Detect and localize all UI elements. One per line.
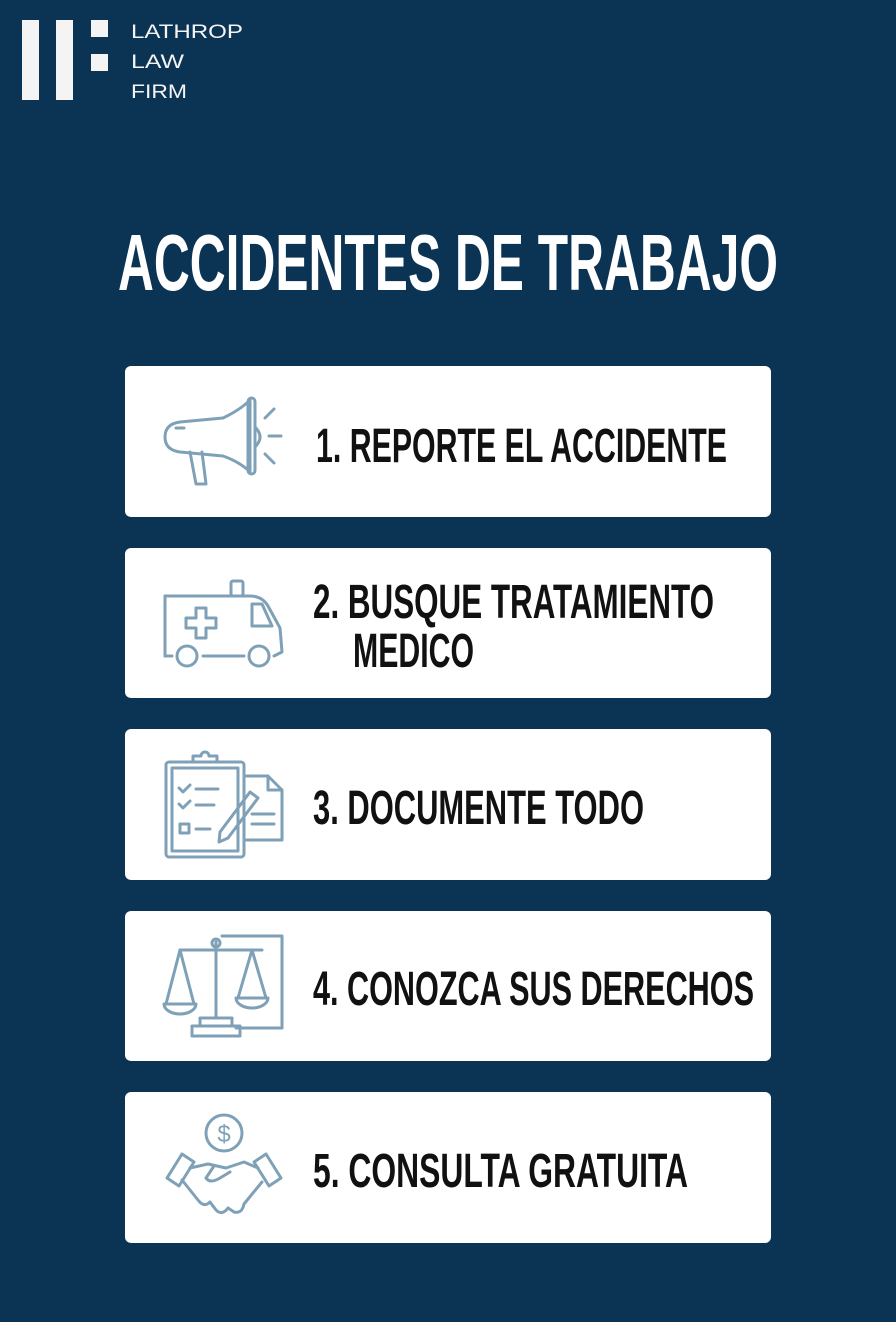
card 5: 5. CONSULTA GRATUITA [313,1145,688,1198]
icon: ambulance [165,581,282,666]
icon: handshake with coin: $ [217,1121,231,1148]
card 2: MEDICO [353,625,474,678]
logo: FIRM [131,82,187,103]
logo: LATHROP [131,22,243,43]
card 2 [125,548,771,698]
card 1 [125,366,771,517]
icon: clipboard [166,752,282,857]
card 5 [125,1092,771,1243]
card 3: 3. DOCUMENTE TODO [313,782,644,835]
icon: megaphone [165,398,281,484]
logo: LAW [131,52,184,73]
card 4 [125,911,771,1061]
card 3 [125,729,771,880]
icon: handshake with coin [167,1115,281,1213]
logo [22,20,243,103]
icon: scales and book [164,936,282,1036]
